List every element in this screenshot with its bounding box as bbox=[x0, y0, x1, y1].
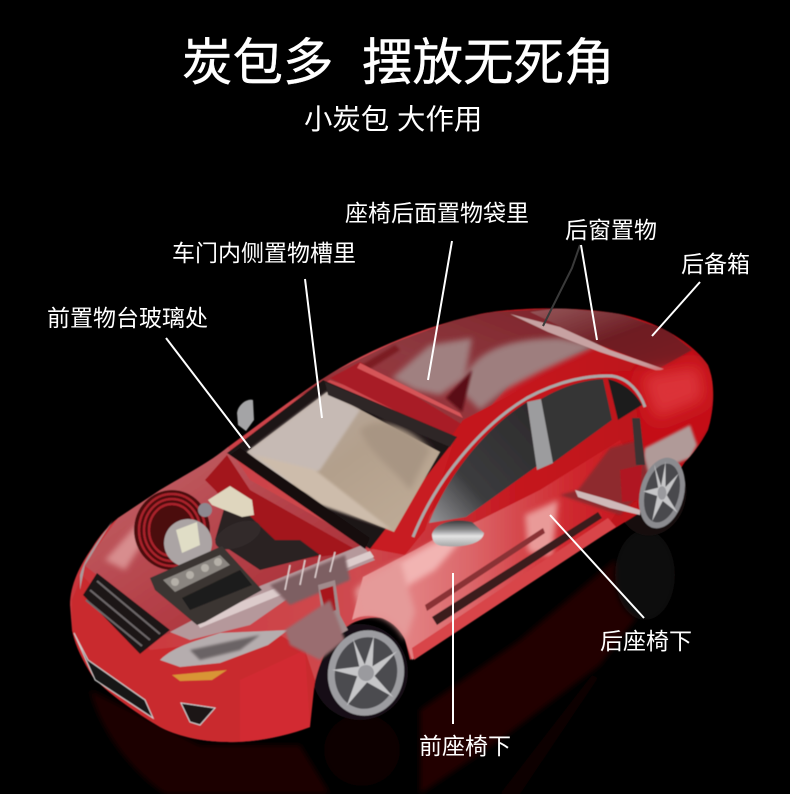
door mirror bbox=[432, 520, 484, 546]
wheel well bbox=[134, 490, 210, 570]
hood highlight bbox=[105, 500, 170, 570]
amber indicator bbox=[172, 670, 227, 681]
title: 炭包多 bbox=[182, 34, 334, 91]
windshield interior bbox=[247, 392, 440, 532]
rear tyre bbox=[609, 447, 695, 543]
rear quarter panel bbox=[600, 353, 713, 446]
label: 前置物台玻璃处: 前置物台玻璃处 bbox=[47, 305, 208, 331]
door rub strip bbox=[432, 512, 602, 625]
rear suspension bbox=[560, 440, 650, 515]
front wheel rim bbox=[320, 623, 412, 723]
title second part: 摆放无死角 bbox=[362, 34, 614, 91]
windshield top band bbox=[325, 382, 457, 447]
leader line: door slot bbox=[305, 279, 322, 418]
label: 车门内侧置物槽里: 车门内侧置物槽里 bbox=[172, 240, 356, 266]
door and fender bbox=[352, 440, 640, 660]
leader line: trunk bbox=[652, 282, 700, 336]
rear muffler bbox=[640, 425, 697, 475]
rear wheel rim bbox=[632, 453, 692, 533]
window frame chrome bbox=[413, 376, 645, 537]
label: 座椅后面置物袋里: 座椅后面置物袋里 bbox=[345, 200, 529, 226]
rear window strip bbox=[510, 314, 664, 371]
b pillar bbox=[527, 399, 553, 470]
main headlight bbox=[160, 630, 288, 667]
side window rear bbox=[541, 379, 612, 465]
windshield frame bbox=[227, 380, 457, 549]
brake booster bbox=[164, 519, 212, 567]
air box bbox=[211, 515, 265, 555]
quarter glass bbox=[608, 379, 642, 420]
left headlight bbox=[80, 520, 113, 590]
label: 前座椅下: 前座椅下 bbox=[419, 733, 511, 759]
engine block bbox=[150, 546, 262, 625]
firewall red bbox=[205, 455, 360, 560]
far mirror bbox=[237, 400, 254, 431]
coolant reservoir bbox=[208, 486, 254, 517]
trunk lid bbox=[530, 308, 692, 368]
front tyre bbox=[312, 624, 408, 720]
front bumper bbox=[72, 575, 315, 742]
reflection of the car on the floor bbox=[90, 530, 675, 794]
coil spring and strut bbox=[318, 580, 348, 640]
lower intake bbox=[74, 633, 153, 718]
label: 后窗置物: 后窗置物 bbox=[565, 217, 657, 243]
roof red ribs bbox=[363, 345, 400, 368]
label: 后座椅下: 后座椅下 bbox=[600, 628, 692, 654]
antenna bbox=[543, 245, 580, 326]
leader line: rear seat bbox=[550, 515, 644, 618]
car illustration bbox=[70, 308, 713, 742]
fender highlight bbox=[355, 560, 415, 640]
leader line: front glass bbox=[166, 338, 250, 448]
grille bbox=[83, 573, 170, 654]
leader line: front seat bbox=[452, 573, 454, 724]
interior seen through roof bbox=[392, 338, 472, 395]
A pillar red bbox=[370, 400, 508, 550]
subtitle: 小炭包 大作用 bbox=[304, 104, 482, 136]
label: 后备箱: 后备箱 bbox=[681, 251, 750, 277]
red cross bar bbox=[330, 362, 463, 438]
door sill bbox=[412, 518, 616, 660]
roof glass bbox=[293, 308, 600, 430]
front hood bbox=[84, 447, 370, 640]
leader line: seat back bbox=[428, 241, 452, 380]
fog lamp bbox=[181, 703, 215, 725]
front suspension bbox=[285, 600, 345, 660]
side window front bbox=[429, 402, 537, 523]
transmission tube bbox=[170, 545, 375, 640]
leader line: rear window bbox=[581, 245, 597, 340]
car body base bbox=[70, 308, 713, 742]
